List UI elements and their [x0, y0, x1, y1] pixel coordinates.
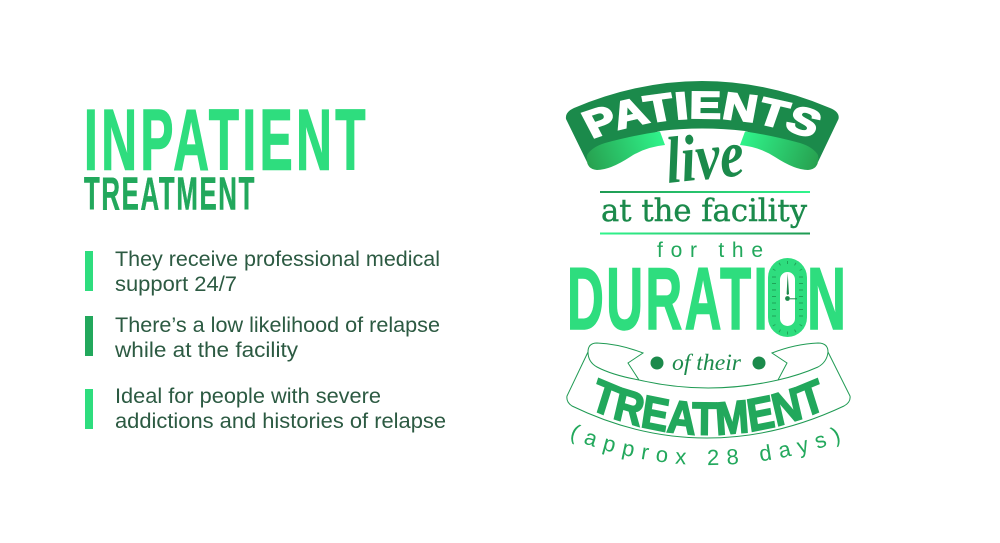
word: duration with clock: N [807, 249, 846, 348]
phrase: of their [650, 350, 766, 375]
script word: live: live [662, 117, 747, 198]
phrase: of their: of their [672, 350, 742, 375]
bullet: low likelihood of relapse: There’s a low likelihood of relapse [115, 313, 440, 337]
bullet: professional medical support: support 24/7 [115, 272, 237, 296]
phrase: for the: for the [657, 239, 763, 262]
bullet: professional medical support: They receive professional medical [115, 247, 440, 271]
heading: treatment: TREATMENT [84, 168, 256, 220]
banner text: PATIENTS [580, 91, 821, 139]
bullet: low likelihood of relapse: while at the facility [114, 338, 298, 362]
icon: clock letter O [768, 258, 807, 337]
heading [84, 92, 369, 220]
word: duration with clock: DURATI [567, 249, 770, 348]
ribbon outline [567, 343, 850, 438]
bullet: professional medical support [85, 247, 440, 296]
word: treatment on arc: TREATMENT [596, 378, 820, 436]
bullet: low likelihood of relapse [85, 313, 440, 362]
heading: inpatient: INPATIENT [84, 92, 369, 188]
bullet: ideal for severe addictions [85, 384, 446, 433]
bullet: ideal for severe addictions: addictions and histories of relapse [115, 409, 446, 433]
ribbon fold left [587, 132, 665, 170]
bullet: ideal for severe addictions: Ideal for people with severe [115, 384, 381, 408]
note: approx 28 days: (approx 28 days) [571, 424, 840, 466]
ribbon fold right [740, 132, 818, 170]
banner: patients [566, 81, 839, 170]
phrase: at the facility: at the facility [601, 193, 807, 229]
